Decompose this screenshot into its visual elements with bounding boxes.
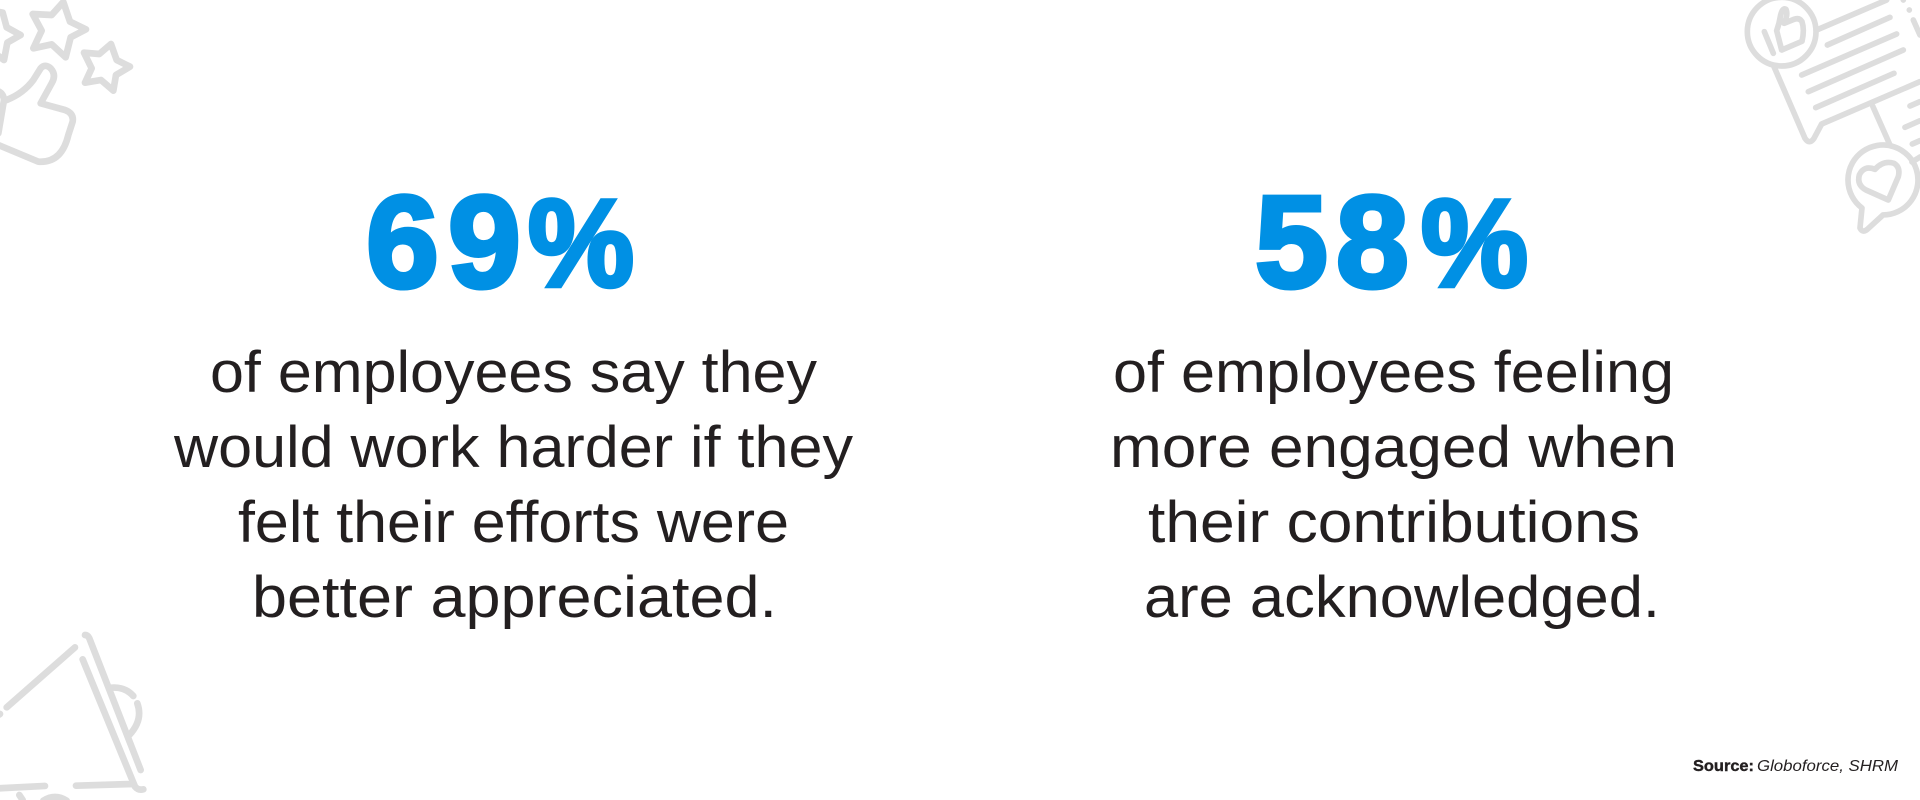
stat value: 69% xyxy=(366,168,634,315)
stat value: 69%: % xyxy=(528,175,634,313)
icon: feedback speech bubbles xyxy=(1747,0,1920,231)
icon: stars and thumbs up xyxy=(0,2,130,162)
stat value: 58% xyxy=(1255,168,1528,315)
stat value: 58%: 8 xyxy=(1336,168,1409,315)
stat description: 58%: are acknowledged. xyxy=(1144,565,1660,630)
stat description: 69%: of employees say they xyxy=(210,340,817,405)
stat description: 69%: would work harder if they xyxy=(173,415,853,480)
stat value: 69%: 6 xyxy=(366,168,439,315)
stat description: 58%: their contributions xyxy=(1148,490,1640,555)
stat value: 58%: % xyxy=(1421,175,1528,313)
stat value: 58%: 5 xyxy=(1255,168,1328,315)
stat: 58% xyxy=(1110,168,1677,630)
stat: 69% xyxy=(173,168,853,630)
stat value: 69%: 9 xyxy=(448,168,521,315)
stat description: 69%: felt their efforts were xyxy=(238,490,789,555)
stat description: 58% xyxy=(1110,340,1677,630)
stat description: 69%: better appreciated. xyxy=(252,565,777,630)
source note: Globoforce, SHRM xyxy=(1757,758,1899,775)
stat description: 69% xyxy=(173,340,853,630)
source note: Source: xyxy=(1693,758,1754,775)
stat description: 58%: of employees feeling xyxy=(1113,340,1674,405)
icon: megaphone xyxy=(0,635,143,800)
stat description: 58%: more engaged when xyxy=(1110,415,1677,480)
